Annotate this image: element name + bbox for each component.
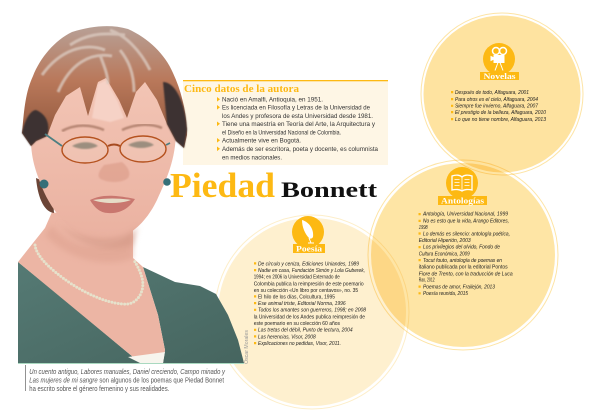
list: Novelas: Después de todo, Alfaguara, 2001 [455, 90, 529, 96]
forehead highlight [92, 80, 124, 122]
list: Novelas: Para otros es el cielo, Alfaguara, 2004 [455, 97, 538, 103]
label: Poesía: Poesía [296, 244, 322, 254]
list: Poesía: este poemario en su colección 60 años [254, 321, 340, 327]
nose [99, 162, 129, 182]
list: Antologías: Poemas de amor, Frailejón, 2013 [423, 284, 496, 290]
circle: Antologías [368, 160, 558, 350]
panel heading: Cinco datos de la autora [184, 84, 300, 95]
title: Piedad Bonnett: Bonnett [281, 177, 378, 202]
label: Antologías: Antologías [441, 196, 484, 206]
label: Novelas: Novelas [484, 72, 516, 81]
title: Piedad Bonnett: Piedad [170, 166, 276, 205]
list: Poesía: Todos los amantes son guerreros, 1998; en 2008 [258, 308, 367, 314]
list: Novelas: Siempre fue invierno, Alfaguara, 2007 [455, 104, 539, 110]
facts list [217, 96, 378, 161]
earrings [40, 180, 48, 188]
photo caption: Las mujeres de mi sangre son algunos de los poemas que Piedad Bonnet [29, 376, 224, 384]
facts list: Nació en Amalfi, Antioquia, en 1951. [222, 96, 323, 104]
eyes [72, 141, 154, 149]
list: Antologías: Tocut fouto, antología de poemas en [423, 258, 502, 264]
list: Antologías: Fiore de Trento, con la traducción de Luca [419, 271, 513, 277]
chest and neck [18, 212, 165, 363]
list: Antologías: Cultura Económica, 2009 [419, 252, 470, 258]
hair [22, 26, 187, 148]
eyebrows [62, 125, 162, 131]
sweater [18, 262, 244, 363]
facts list: Es licenciada en Filosofía y Letras de la Universidad de [222, 104, 370, 112]
photo caption: Un cuento antiguo, Labores manuales, Daniel creciendo, Campo minado y [29, 367, 225, 376]
glasses [45, 134, 170, 163]
portrait photo [18, 26, 244, 364]
list: Poesía: Nadie en casa, Fundación Simón y Lola Guberek, [258, 268, 365, 274]
list: Novelas [451, 90, 547, 123]
icon: quill [292, 216, 324, 248]
list: Antologías: No es esto que la vida, Arango Editores, [423, 219, 509, 225]
facts list: los Andes y profesora de esta Universidad desde 1981. [222, 113, 373, 120]
photo bottom line [18, 363, 244, 364]
list: Antologías: Editorial Hiperión, 2003 [419, 238, 471, 244]
label: Poesía [293, 244, 325, 254]
list: Antologías [418, 212, 513, 297]
list: Poesía: El hilo de los días, Colcultura, 1995 [258, 294, 335, 300]
facts list: el Diseño en la Universidad Nacional de Colombia. [222, 129, 341, 136]
circle: Novelas [421, 13, 583, 175]
list: Antologías: Lo demás es silencio: antología poética, [423, 231, 510, 237]
facts list: Además de ser escritora, poeta y docente, es columnista [222, 146, 378, 153]
white shirt [128, 352, 165, 363]
list: Antologías: 1998 [419, 225, 428, 231]
facts list: en medios nacionales. [222, 154, 282, 161]
face [31, 70, 176, 242]
list: Poesía: Ese animal triste, Editorial Norma, 1996 [258, 301, 346, 307]
list: Poesía: Las herencias, Visor, 2008 [258, 334, 316, 340]
list: Poesía: Las tretas del débil, Punto de lectura, 2004 [258, 328, 353, 334]
list: Poesía [254, 261, 367, 347]
list: Poesía: en su colección «Un libro por centavos», no. 35 [254, 288, 358, 294]
photo credit: Óscar Morales [243, 330, 250, 364]
list: Antologías: Antología, Universidad Nacional, 1999 [422, 212, 508, 218]
pearl necklace [35, 245, 143, 304]
chin shadow [58, 222, 138, 248]
photo caption: ha escrito sobre el género femenino y sus realidades. [29, 384, 169, 393]
list: Novelas: El prestigio de la belleza, Alfaguara, 2010 [455, 110, 547, 116]
list: Antologías: Poesía reunida, 2015 [423, 291, 469, 297]
list: Poesía: 1994; en 2006 la Universidad Externado de [254, 275, 340, 281]
circle: Poesía [215, 215, 409, 409]
mouth [90, 196, 135, 213]
list: Antologías: Rao, 2012 [419, 278, 435, 284]
list: Antologías: Los privilegios del olvido, Fondo de [423, 245, 500, 251]
facts list: Tiene una maestría en Teoría del Arte, la Arquitectura y [222, 121, 376, 128]
title: Piedad Bonnett [170, 166, 378, 205]
label: Novelas [480, 72, 519, 81]
list: Poesía: Colombia publica la reimpresión de este poemario [254, 281, 364, 287]
far hair behind ear [36, 178, 54, 213]
list: Poesía: Explicaciones no pedidas, Visor, 2011. [258, 341, 341, 347]
facts list: Actualmente vive en Bogotá. [222, 138, 301, 144]
icon: film camera [483, 43, 515, 75]
list: Poesía: De círculo y ceniza, Ediciones Uniandes, 1989 [258, 261, 359, 267]
icon: open book [446, 167, 478, 199]
neck shadow [45, 225, 133, 263]
list: Novelas: Lo que no tiene nombre, Alfaguara, 2013 [455, 117, 547, 123]
photo caption [25, 365, 225, 393]
list: Poesía: la Universidad de los Andes publica reimpresión de [254, 314, 365, 320]
hair highlights [42, 30, 150, 92]
list: Antologías: italiano publicada por la editorial Pontos [419, 265, 508, 271]
dark hair ends [22, 82, 187, 148]
panel: Cinco datos de la autora [183, 80, 388, 165]
